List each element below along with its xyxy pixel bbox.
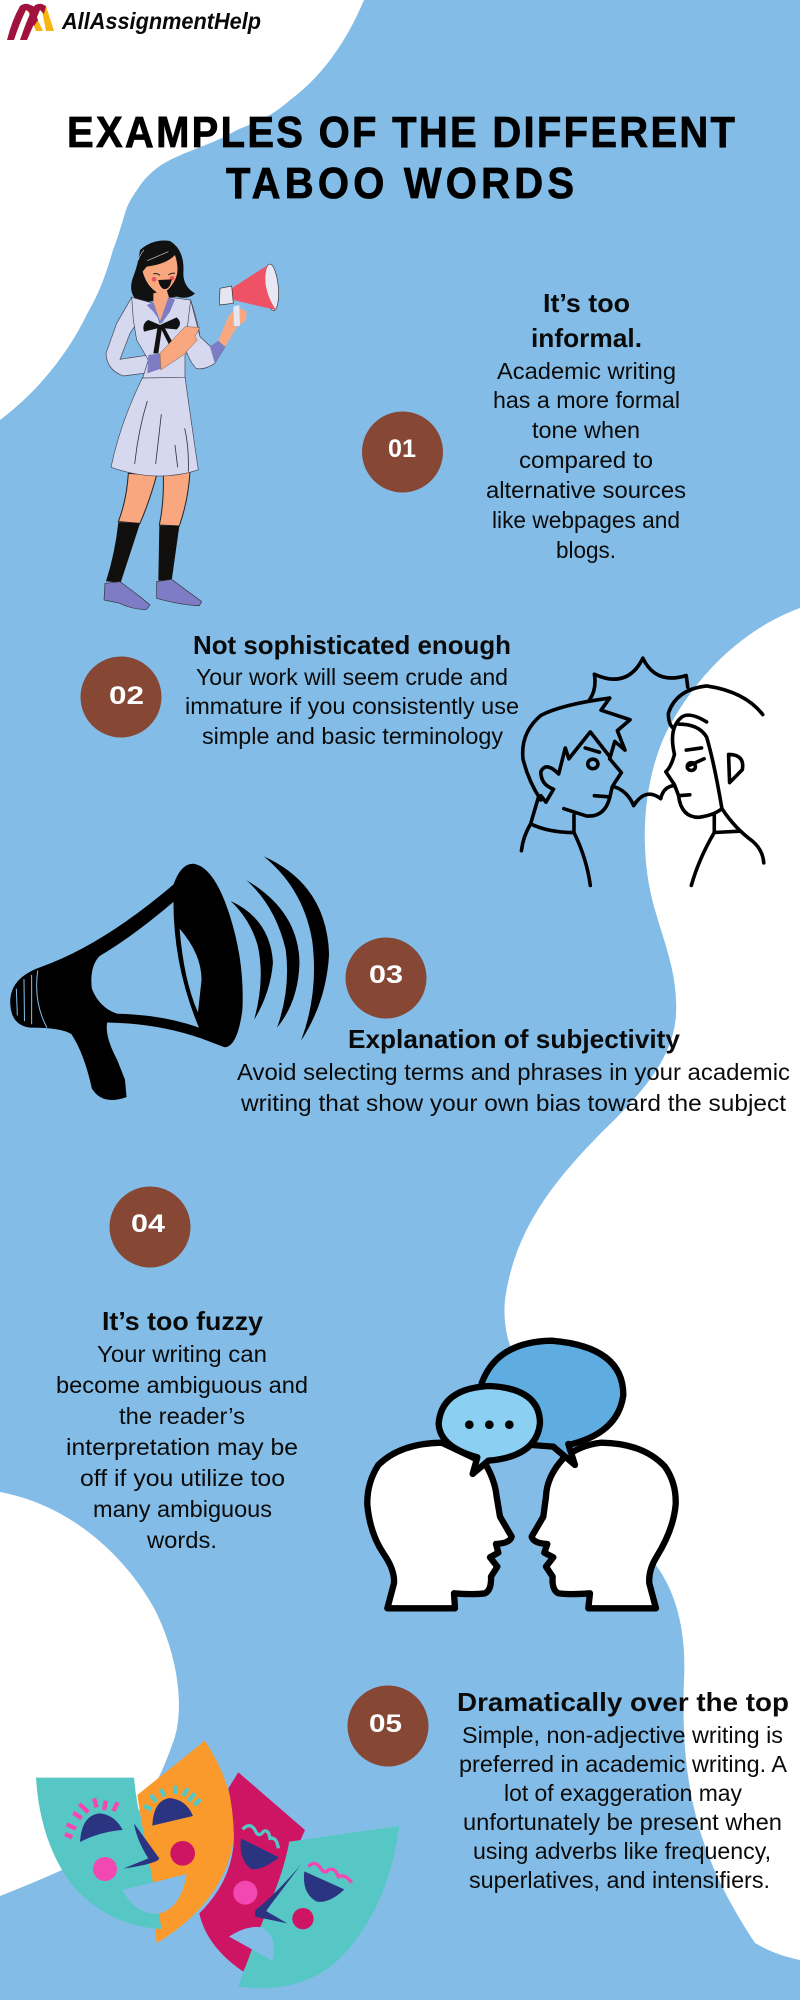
man eye xyxy=(588,759,598,769)
number badge 02 xyxy=(80,656,162,738)
body 05: preferred in academic writing. A xyxy=(459,1751,788,1777)
body 03: Avoid selecting terms and phrases in your academic xyxy=(237,1059,790,1085)
hair highlights xyxy=(138,250,168,261)
megaphone bell xyxy=(263,264,280,311)
torso xyxy=(132,297,200,378)
icon: logo mark xyxy=(7,4,54,40)
right arm and hand xyxy=(218,307,247,347)
woman xyxy=(666,686,764,885)
number badge 03 xyxy=(346,938,426,1018)
woman lower body xyxy=(104,377,202,609)
number badge 03: 03 xyxy=(369,961,403,989)
illustration: woman with megaphone xyxy=(104,241,280,609)
lashes teal xyxy=(144,1786,201,1809)
left mask nose xyxy=(123,1823,159,1869)
white shape top-left xyxy=(0,0,364,420)
body 05: unfortunately be present when xyxy=(463,1809,782,1835)
body 04: words. xyxy=(146,1527,217,1553)
large speech bubble xyxy=(482,1341,623,1465)
right mask cheeks xyxy=(233,1881,314,1929)
left mask eyes xyxy=(80,1798,193,1842)
illustration: two heads with speech bubbles xyxy=(367,1341,676,1608)
megaphone handle xyxy=(233,305,240,326)
body 01: compared to xyxy=(519,447,653,473)
mouth xyxy=(158,279,172,289)
body 01: alternative sources xyxy=(486,477,686,503)
number badge 01: 01 xyxy=(388,435,416,463)
heading 04: It’s too fuzzy xyxy=(102,1306,264,1336)
cheeks xyxy=(152,277,156,282)
right mask eyes xyxy=(241,1838,344,1902)
body 01: Academic writing xyxy=(497,358,676,384)
logo xyxy=(7,4,261,40)
body 01: has a more formal xyxy=(493,387,680,413)
number badge 04: 04 xyxy=(131,1210,165,1238)
body 01 xyxy=(486,358,686,563)
legs xyxy=(118,472,190,526)
body 05: Simple, non-adjective writing is xyxy=(462,1722,783,1748)
illustration: black megaphone xyxy=(10,856,329,1100)
collar xyxy=(147,297,175,323)
body 01: blogs. xyxy=(556,537,616,563)
heading 01 xyxy=(531,288,642,353)
skirt folds xyxy=(135,401,188,472)
title: TABOO WORDS xyxy=(226,158,574,207)
body 03: writing that show your own bias toward the subject xyxy=(240,1090,787,1116)
body 01: like webpages and xyxy=(492,507,680,533)
illustration: arguing couple xyxy=(521,658,764,885)
number badge 01 xyxy=(362,412,443,492)
right mask nose xyxy=(255,1865,301,1923)
left mask cheeks xyxy=(93,1841,195,1881)
socks xyxy=(106,522,179,583)
megaphone ribs xyxy=(16,970,47,1028)
body 05: superlatives, and intensifiers. xyxy=(469,1867,770,1893)
heading 03: Explanation of subjectivity xyxy=(348,1024,681,1054)
illustration: theatre masks xyxy=(36,1741,399,1988)
body 04: become ambiguous and xyxy=(56,1372,308,1398)
megaphone body xyxy=(232,265,276,310)
left sleeve xyxy=(106,297,148,376)
right sleeve xyxy=(185,300,225,369)
squiggle pink xyxy=(308,1863,352,1883)
woman upper body xyxy=(106,241,280,378)
white shape bottom-left xyxy=(0,1492,179,1896)
title xyxy=(67,107,735,207)
item 01 xyxy=(362,288,686,563)
left teal mask xyxy=(36,1778,162,1929)
body 04: Your writing can xyxy=(97,1341,267,1367)
body 03 xyxy=(237,1059,790,1116)
man xyxy=(521,698,630,885)
bow xyxy=(143,317,180,353)
small speech bubble xyxy=(439,1386,540,1474)
woman eye xyxy=(687,763,695,770)
face xyxy=(143,255,177,293)
ellipsis dots xyxy=(465,1420,514,1429)
body 01: tone when xyxy=(532,417,640,443)
white shape right xyxy=(504,608,800,1960)
item 04 xyxy=(56,1186,308,1553)
left mask smile xyxy=(123,1874,187,1914)
orange mask xyxy=(137,1741,234,1943)
neck xyxy=(153,290,169,323)
megaphone inner opening xyxy=(180,929,202,1012)
squiggle teal xyxy=(243,1826,278,1848)
sound waves xyxy=(231,856,329,1041)
body 04: the reader’s xyxy=(119,1403,245,1429)
logo wordmark: AllAssignmentHelp xyxy=(61,8,261,34)
number badge 02: 02 xyxy=(109,682,144,710)
right mask smile xyxy=(229,1927,274,1961)
burst between faces xyxy=(615,786,673,806)
body 05: lot of exaggeration may xyxy=(504,1780,742,1806)
heading 01: informal. xyxy=(531,323,642,353)
large bubble tail xyxy=(553,1444,575,1465)
body 04: interpretation may be xyxy=(66,1434,298,1460)
heading 01: It’s too xyxy=(543,288,630,318)
item 03 xyxy=(237,938,790,1116)
skirt xyxy=(111,377,198,476)
body 02: immature if you consistently use xyxy=(185,693,519,719)
closed eyes xyxy=(153,273,175,275)
body 04 xyxy=(56,1341,308,1553)
body 05 xyxy=(459,1722,788,1893)
left head xyxy=(367,1443,512,1608)
megaphone base xyxy=(219,286,233,305)
body 04: many ambiguous xyxy=(93,1496,272,1522)
hair xyxy=(131,241,195,303)
lashes pink xyxy=(65,1798,118,1837)
burst top xyxy=(589,658,688,700)
right head xyxy=(532,1443,676,1608)
number badge 05 xyxy=(348,1686,428,1766)
left cuff xyxy=(147,353,162,373)
right teal mask xyxy=(238,1826,399,1988)
body 02 xyxy=(185,664,519,749)
item 05 xyxy=(348,1686,789,1893)
heading 02: Not sophisticated enough xyxy=(193,630,511,660)
body 04: off if you utilize too xyxy=(80,1465,285,1491)
item 02 xyxy=(80,630,519,749)
body 02: simple and basic terminology xyxy=(202,723,503,749)
forearm and hand xyxy=(160,327,200,370)
right cuff xyxy=(210,341,225,364)
title: EXAMPLES OF THE DIFFERENT xyxy=(67,107,735,156)
body 05: using adverbs like frequency, xyxy=(473,1838,771,1864)
shoes xyxy=(104,579,202,609)
magenta mask xyxy=(199,1772,305,1972)
number badge 05: 05 xyxy=(369,1710,402,1738)
megaphone inner cone xyxy=(91,902,199,1028)
heading 05: Dramatically over the top xyxy=(457,1687,789,1717)
megaphone body xyxy=(10,864,243,1100)
number badge 04 xyxy=(110,1186,190,1268)
body 02: Your work will seem crude and xyxy=(196,664,508,690)
